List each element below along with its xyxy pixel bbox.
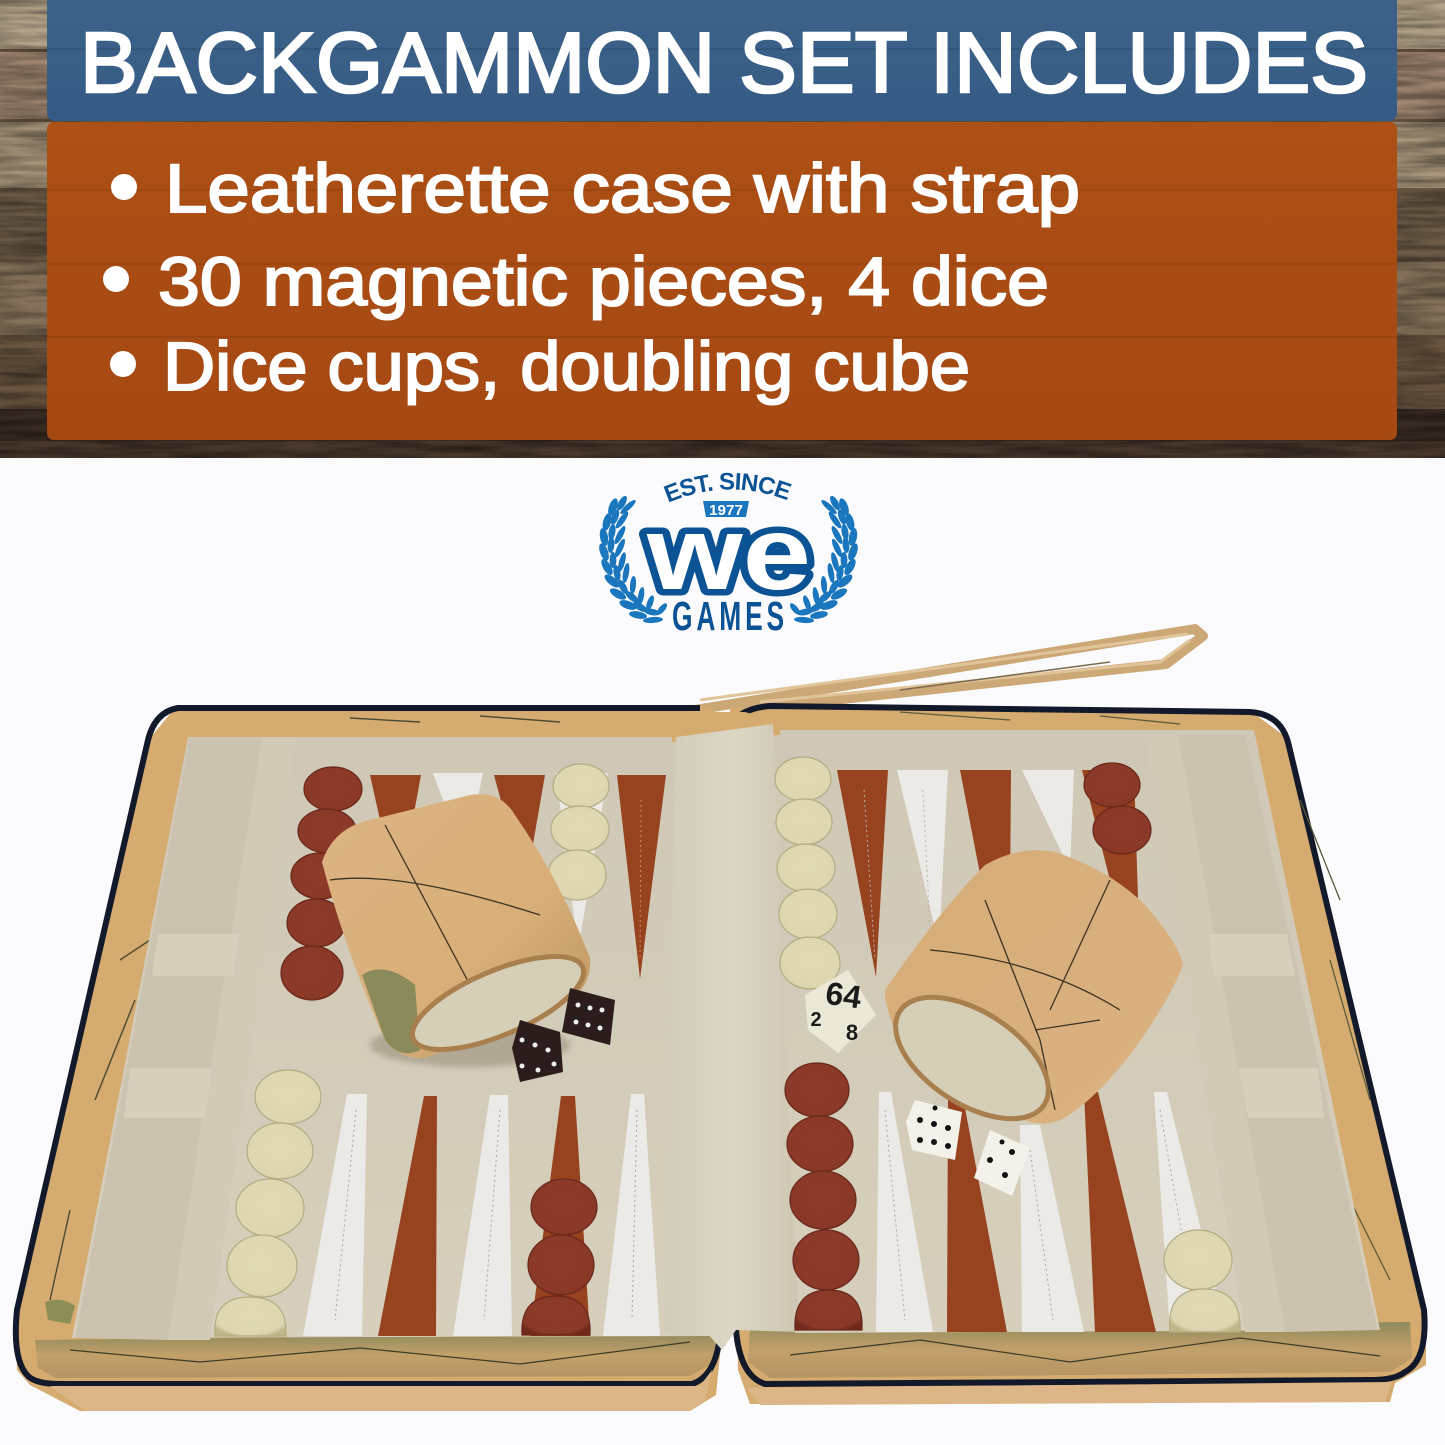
board points: top right bbox=[837, 770, 1138, 977]
logo: WE Games bbox=[599, 472, 858, 639]
left half of case bbox=[15, 708, 722, 1411]
checkers: cream, bottom right bbox=[1164, 1230, 1240, 1332]
bullet: dice cups and doubling cube: Dice cups, doubling cube bbox=[163, 328, 970, 405]
feature list panel bbox=[47, 122, 1397, 440]
title banner bbox=[47, 0, 1397, 121]
dice cup: left bbox=[322, 794, 595, 1068]
ribbon: 1977 bbox=[703, 501, 749, 519]
checkers: dark red, bottom right bbox=[785, 1063, 862, 1330]
bullet: magnetic pieces and dice: 30 magnetic pieces, 4 dice bbox=[158, 243, 1049, 320]
board case bbox=[15, 629, 1426, 1411]
strap bbox=[682, 629, 1203, 712]
ribbon: 1977: 1977 bbox=[709, 502, 743, 519]
board points: bottom left bbox=[303, 1094, 660, 1336]
logo wordmark: we: we bbox=[646, 496, 811, 612]
doubling cube bbox=[805, 970, 876, 1053]
logo text: est since: EST. SINCE bbox=[664, 472, 792, 502]
board points: top left bbox=[370, 773, 666, 979]
checkers: dark red, top left bbox=[281, 767, 362, 1000]
dark dice bbox=[512, 988, 615, 1082]
checkers: cream, top left bbox=[548, 764, 609, 900]
felt tray: left bbox=[72, 737, 715, 1338]
logo text: games: GAMES bbox=[672, 593, 788, 639]
left rail divider bbox=[124, 738, 296, 1340]
bottom tan edges bbox=[50, 1370, 712, 1411]
bullet: leatherette case: Leatherette case with strap bbox=[165, 150, 1080, 227]
white dice bbox=[906, 1100, 1030, 1196]
checkers: dark red, top right bbox=[1084, 763, 1151, 854]
doubling cube: 8 bbox=[846, 1020, 858, 1045]
rail: right inner wall bbox=[1178, 735, 1378, 1332]
rail: left inner wall bbox=[75, 738, 262, 1340]
checkers: cream, top right bbox=[775, 757, 840, 989]
wood plank background bbox=[0, 0, 1445, 458]
right rail divider bbox=[1145, 735, 1324, 1332]
board points: bottom right bbox=[876, 1092, 1226, 1332]
title: BACKGAMMON SET INCLUDES bbox=[80, 16, 1368, 111]
icon: laurel wreath bbox=[597, 494, 860, 624]
doubling cube: 64 bbox=[823, 975, 864, 1015]
doubling cube: 2 bbox=[810, 1009, 822, 1031]
center spine bbox=[664, 724, 800, 1350]
checkers: cream, bottom left bbox=[215, 1070, 321, 1336]
hinge fill behind spine bbox=[672, 712, 780, 742]
dice cup: right bbox=[875, 850, 1183, 1143]
right half of case bbox=[730, 706, 1426, 1404]
checkers: dark red, bottom left bbox=[522, 1179, 597, 1335]
felt tray: right bbox=[772, 730, 1380, 1333]
